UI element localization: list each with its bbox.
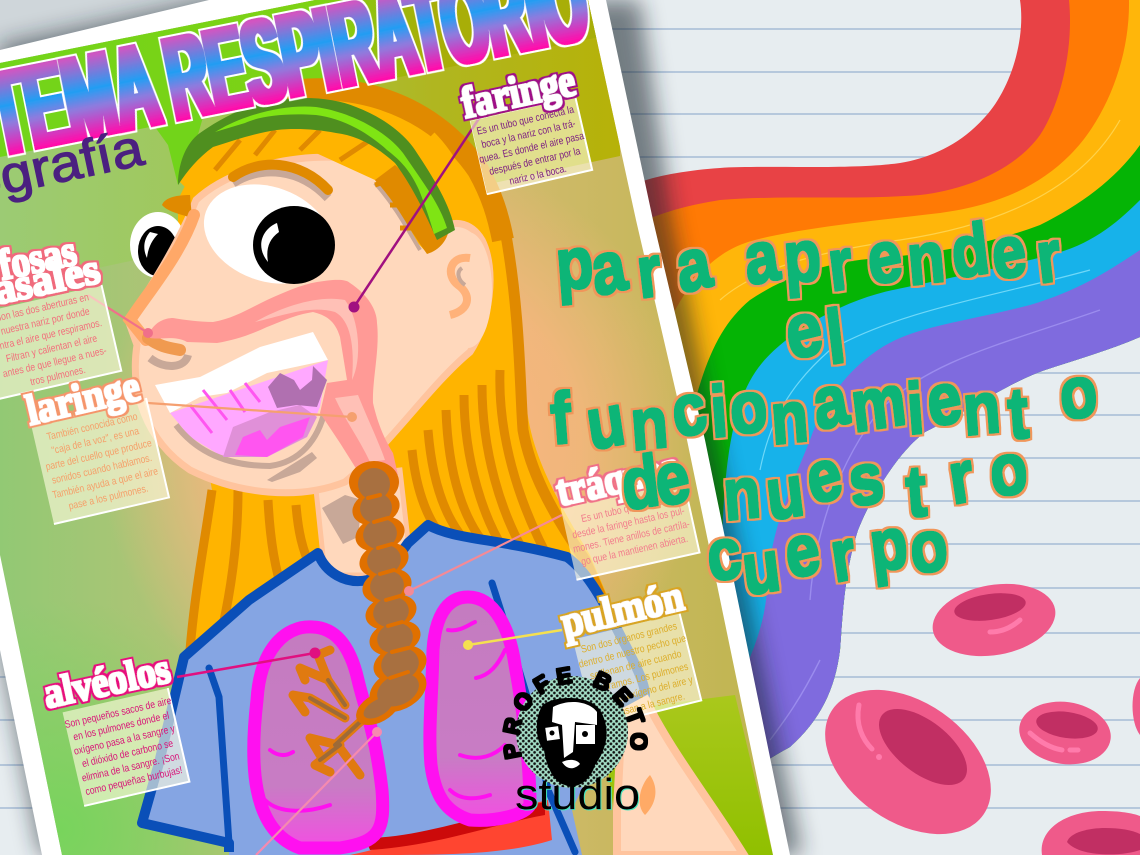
poster drop shadow — [0, 0, 802, 855]
poster: sistema respiratorio — [0, 0, 800, 855]
note: tráquea: mones. Tiene anillos de cartíla- — [572, 518, 691, 556]
painted rainbow — [644, 0, 1140, 758]
note: laringe: parte del cuello que produce — [44, 437, 153, 473]
note: alvéolos: Son pequeños sacos de aire — [64, 695, 173, 731]
red blood cells — [798, 575, 1140, 855]
nose stripe — [130, 215, 194, 340]
face — [128, 157, 490, 493]
leader line: tráquea — [404, 515, 562, 596]
note: pulmón: Son dos órganos grandes — [580, 620, 679, 656]
note: laringe: pase a los pulmones. — [68, 483, 149, 513]
label: pulmón — [463, 573, 701, 727]
liver — [350, 800, 552, 855]
note: pulmón: lo pasan a la sangre. — [606, 691, 686, 722]
red blood cell: small — [1015, 696, 1115, 770]
note: tráquea: go que la mantienen abierta. — [580, 533, 689, 568]
note: faringe: Es un tubo que conecta la — [476, 104, 576, 138]
note: fosas nasales: Filtran y calientan el aire — [5, 333, 98, 365]
heading: pulmón: pulmón — [557, 573, 688, 647]
headline line 5: cuerpo — [701, 503, 952, 611]
note: fosas nasales: nuestra nariz por donde — [0, 306, 91, 338]
label: alvéolos — [40, 646, 321, 806]
note: tráquea — [560, 480, 700, 580]
back hair — [178, 80, 630, 670]
note: faringe: nariz o la boca. — [508, 163, 568, 188]
note: laringe: "caja de la voz", es una — [51, 425, 141, 457]
logo: halftone circle — [516, 676, 628, 788]
note: fosas nasales — [0, 285, 121, 399]
airway: nasal cavity, pharynx and larynx — [150, 280, 398, 475]
note: laringe: También conocida como — [46, 411, 139, 443]
headband — [178, 98, 455, 240]
note: alvéolos: el dióxido de carbono se — [81, 738, 174, 770]
leader line: bronquios — [256, 727, 382, 855]
arm — [617, 700, 744, 855]
trachea — [349, 461, 426, 725]
label: fosas nasales — [0, 228, 153, 399]
heading: faringe: faringe — [457, 56, 580, 128]
poster gradient background — [0, 0, 800, 855]
red blood cell: large — [798, 660, 1018, 855]
note: faringe: quea. Es donde el aire pasa — [478, 130, 586, 166]
character illustration — [128, 80, 744, 855]
label: laringe — [22, 363, 357, 524]
note: alvéolos: elimina de la sangre. ¡Son — [81, 751, 181, 785]
big eye — [204, 184, 335, 284]
neck shadow — [322, 495, 362, 544]
note: pulmón: se llenan de aire cuando — [589, 648, 683, 683]
logo: profe beto studio — [502, 666, 648, 819]
logo: studio wordmark: studio — [515, 770, 640, 819]
poster sheet — [0, 0, 790, 855]
small eye — [130, 212, 186, 278]
note: laringe — [31, 398, 169, 524]
red blood cell: bottom right — [1042, 811, 1140, 855]
bronchial tree — [288, 646, 364, 780]
note: tráquea: desde la faringe hasta los pul- — [571, 505, 686, 542]
mouth — [155, 332, 328, 482]
lung folds — [265, 622, 505, 811]
eyebrow — [233, 165, 328, 198]
front hair — [162, 130, 448, 254]
label: tráquea — [404, 443, 700, 596]
note: alvéolos: oxígeno pasa a la sangre y — [73, 723, 176, 758]
note: fosas nasales: tros pulmones. — [29, 364, 87, 389]
headline: para aprender el funcionamiento de nuestro cuerpo — [548, 209, 1101, 611]
note: pulmón — [573, 613, 701, 727]
red blood cell: right edge — [1132, 678, 1140, 735]
note: alvéolos: en los pulmones donde el — [72, 710, 170, 744]
note: pulmón: toman el oxígeno del aire y — [591, 674, 694, 711]
heading: laringe: laringe — [22, 363, 144, 435]
leader line: faringe — [348, 117, 480, 312]
label: faringe — [348, 56, 592, 313]
headline line 1: para aprender — [553, 209, 1065, 314]
note: laringe: sonidos cuando hablamos. — [51, 452, 153, 487]
leader line: fosas nasales — [88, 295, 153, 338]
note: tráquea: Es un tubo que conecta — [580, 494, 672, 525]
headline line 4: de nuestro — [617, 428, 1032, 536]
red blood cell: top — [927, 575, 1061, 665]
right lung — [430, 597, 530, 820]
headline line 2: el — [778, 284, 849, 380]
leader line: pulmón — [463, 630, 562, 650]
leader line: alvéolos — [177, 648, 320, 677]
nose tip — [148, 338, 188, 366]
leader line: laringe — [148, 403, 357, 422]
note: faringe — [470, 97, 592, 194]
note: fosas nasales: antes de que llegue a nues- — [2, 345, 108, 381]
neck — [315, 470, 412, 575]
left lung — [254, 627, 383, 848]
note: pulmón: respiramos. Los pulmones — [589, 661, 690, 697]
heading: tráquea: tráquea — [552, 443, 684, 516]
logo: arched name: PROFE BETO — [502, 666, 648, 760]
logo: caricature face — [537, 698, 607, 786]
note: faringe: después de entrar por la — [488, 145, 582, 178]
shirt — [142, 525, 645, 855]
ear — [444, 232, 492, 348]
note: faringe: boca y la nariz con la trá- — [480, 118, 577, 151]
note: pulmón: dentro de nuestro pecho que — [578, 633, 687, 671]
note: alvéolos: como pequeñas burbujas! — [84, 764, 184, 798]
heading: alvéolos: alvéolos — [40, 646, 174, 718]
note: laringe: También ayuda a que el aire — [51, 466, 159, 502]
note: alvéolos — [62, 688, 190, 806]
headline line 3: funcionamiento — [548, 351, 1101, 466]
